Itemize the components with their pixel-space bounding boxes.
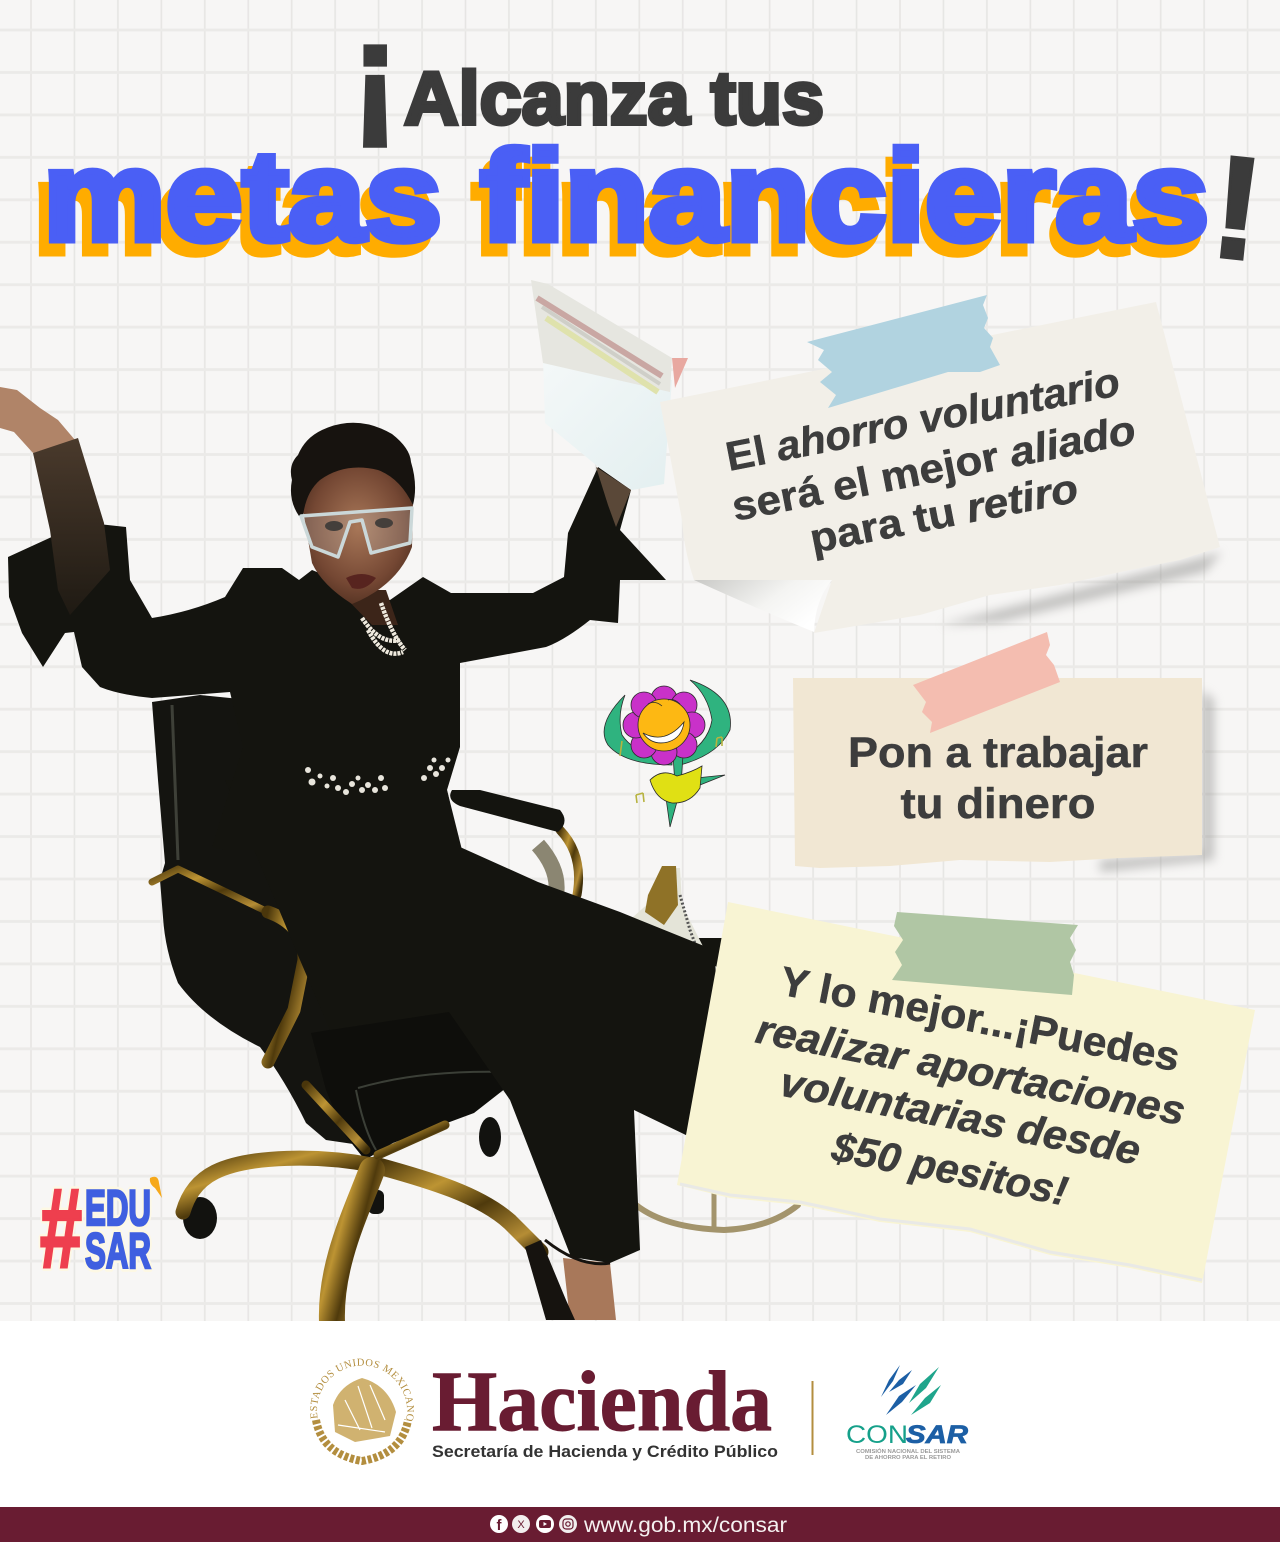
chair wheels xyxy=(183,1117,501,1239)
note 2 text: tu dinero xyxy=(900,780,1096,828)
eagle xyxy=(333,1378,396,1442)
social icons xyxy=(490,1515,577,1534)
title line 2: metas financieras!: ! xyxy=(1205,124,1270,291)
title xyxy=(33,0,1270,291)
neck xyxy=(338,590,398,625)
note 1 text: El ahorro voluntario xyxy=(722,358,1123,480)
chair gold base xyxy=(183,1085,540,1322)
logo: CONSAR: SAR xyxy=(906,1421,968,1449)
chair back xyxy=(152,695,370,1145)
hair xyxy=(291,423,415,516)
logo: national emblem: ESTADOS UNIDOS MEXICANOS xyxy=(310,1358,414,1421)
right sheer sleeve xyxy=(596,467,631,527)
glasses xyxy=(301,508,412,557)
logo: Hacienda wordmark: Secretaría de Hacienda y Crédito Público xyxy=(432,1443,778,1461)
wreath xyxy=(316,1420,408,1461)
left hand xyxy=(0,387,75,453)
icon: dancing flower xyxy=(604,680,730,827)
illustration: woman in black suit xyxy=(0,387,730,1320)
logo: national emblem xyxy=(310,1358,414,1465)
title line 2: metas financieras!: metas financieras xyxy=(33,138,1203,281)
chair arm right xyxy=(450,790,579,895)
logo: CONSAR: CON xyxy=(846,1421,908,1449)
illustration: folder held up xyxy=(531,280,688,490)
CONSAR streaks xyxy=(881,1365,941,1415)
note 3 text: $50 pesitos! xyxy=(827,1123,1072,1214)
note 1: ahorro voluntario xyxy=(660,295,1222,633)
page curl xyxy=(694,580,832,632)
note 1 text: será el mejor aliado xyxy=(728,406,1139,530)
logo: CONSAR: DE AHORRO PARA EL RETIRO xyxy=(865,1455,952,1461)
halo layer xyxy=(40,1166,151,1291)
foot and shoe xyxy=(525,1240,616,1320)
title line 1: ¡Alcanza tus: Alcanza tus xyxy=(404,56,824,140)
pink tape xyxy=(913,632,1060,733)
lips xyxy=(346,574,376,589)
logo: CONSAR xyxy=(846,1365,968,1461)
title line 1: ¡Alcanza tus xyxy=(351,0,824,154)
chair seat xyxy=(311,1010,520,1160)
footrest ring xyxy=(636,1180,798,1230)
note 2: pon a trabajar xyxy=(793,632,1214,872)
halo layer: SAR xyxy=(85,1223,151,1279)
note 1 text xyxy=(722,358,1139,562)
halo layer: # xyxy=(40,1166,82,1291)
eyes xyxy=(325,518,393,531)
divider xyxy=(812,1381,814,1455)
note 2 text: Pon a trabajar xyxy=(848,729,1148,777)
logo: CONSAR: COMISIÓN NACIONAL DEL SISTEMA xyxy=(856,1447,960,1455)
halo layer: EDU xyxy=(85,1180,151,1236)
leaves and stem xyxy=(604,680,730,827)
social icons: X xyxy=(517,1519,525,1531)
blue tape xyxy=(807,295,1000,408)
logo: #EDUSAR xyxy=(40,1166,162,1291)
footer: maroon bar xyxy=(0,1507,1280,1543)
face xyxy=(303,464,413,604)
jacket with arms and cuffs xyxy=(8,467,666,850)
note 3 text: Y lo mejor...¡Puedes xyxy=(776,958,1184,1080)
note 2 text xyxy=(848,729,1148,828)
music notes xyxy=(620,737,722,803)
note 3 text xyxy=(752,958,1189,1214)
chair gold arm left xyxy=(152,869,304,1062)
skirt xyxy=(650,766,702,803)
decorative telephone on desk xyxy=(632,866,722,975)
title line 2: metas financieras!: metas financieras xyxy=(43,125,1209,268)
note 3 text: voluntarias desde xyxy=(776,1059,1144,1174)
logo: #EDUSAR: # xyxy=(40,1166,82,1291)
trousers xyxy=(225,780,730,1263)
face xyxy=(638,699,690,751)
website: www.gob.mx/consar xyxy=(583,1514,787,1537)
illustration: office chair xyxy=(152,695,798,1322)
note 1 text: para tu retiro xyxy=(806,465,1082,562)
social icons: f xyxy=(496,1517,502,1534)
logo: #EDUSAR: EDU xyxy=(85,1180,151,1236)
pearl necklace xyxy=(362,603,405,654)
pearl buttons on waist xyxy=(305,758,450,795)
logo: Hacienda wordmark: Hacienda xyxy=(432,1353,772,1449)
note 3 text: realizar aportaciones xyxy=(752,1006,1189,1134)
note 3: aportaciones voluntarias xyxy=(677,902,1255,1283)
green tape xyxy=(892,912,1078,995)
footer: white logo band xyxy=(0,1321,1280,1507)
left sheer sleeve xyxy=(33,438,110,615)
logo: #EDUSAR: SAR xyxy=(85,1223,151,1279)
petals xyxy=(623,686,705,765)
